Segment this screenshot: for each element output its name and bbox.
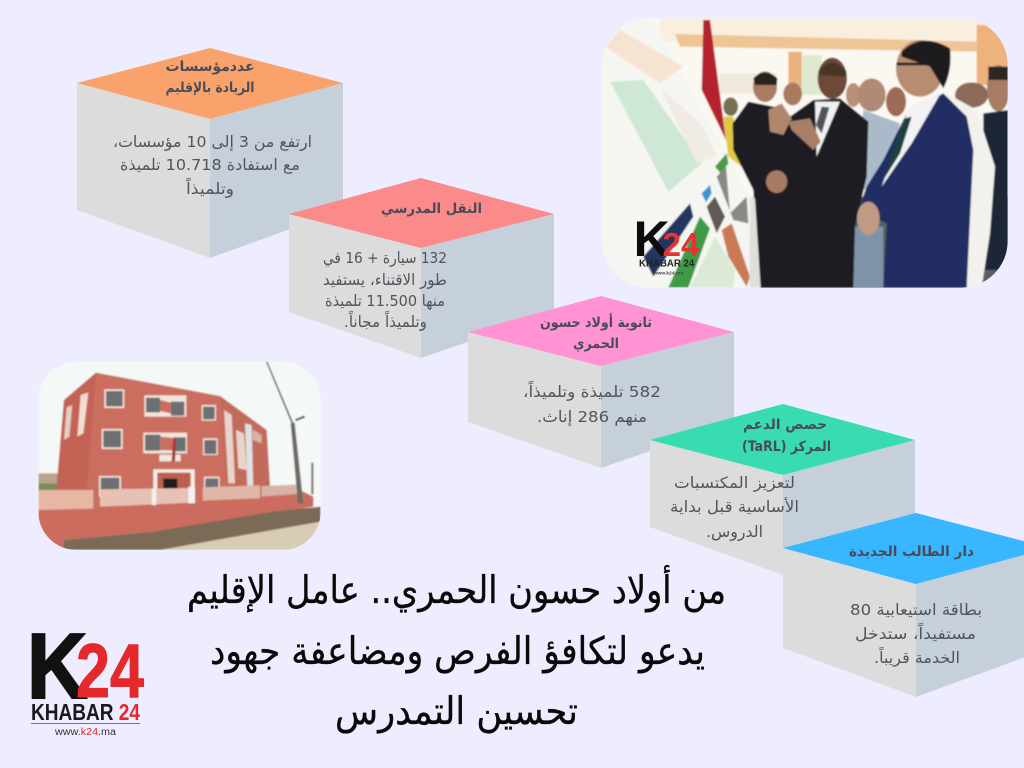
cube 4 body: الدروس. — [706, 523, 763, 542]
cube 5: new student house — [783, 513, 1024, 697]
cube 4 body — [670, 474, 799, 542]
cube 1 body: مع استفادة 10.718 تلميذة — [120, 156, 300, 175]
cube 4 heading: المركز (TaRL) — [742, 439, 831, 455]
cube 5 heading: دار الطالب الجديدة — [849, 544, 974, 560]
cube 3 body — [523, 381, 661, 427]
windows — [104, 389, 124, 408]
pole — [291, 423, 303, 503]
logo: Khabar24: KHABAR 24 — [31, 699, 140, 725]
man in dark suit, left — [733, 102, 797, 288]
wall and fence — [37, 492, 313, 552]
cube 2 body: منها 11.500 تلميذة — [325, 292, 445, 311]
cube 1 heading: الريادة بالإقليم — [166, 80, 254, 96]
central man — [784, 97, 870, 288]
photo watermark: 24 — [662, 227, 700, 264]
title: يدعو لتكافؤ الفرص ومضاعفة جهود — [210, 629, 705, 674]
cube 3 body: 582 تلميذة وتلميذاً، — [523, 381, 661, 402]
cube 5 body: بطاقة استيعابية 80 — [850, 601, 982, 619]
photo watermark: KHABAR 24 — [639, 259, 695, 270]
cube 2 body: طور الاقتناء، يستفيد — [323, 271, 447, 289]
photo watermark: K — [634, 211, 670, 267]
cube 2 body: 132 سيارة + 16 في — [323, 249, 447, 268]
photo watermark — [634, 211, 700, 276]
cube 2 body — [323, 249, 447, 332]
cube 4 body: الأساسية قبل بداية — [670, 497, 799, 516]
cube 4: TaRL support sessions — [650, 404, 915, 575]
man in navy suit — [858, 93, 973, 288]
cube 5 body: مستفيداً، ستدخل — [855, 623, 976, 643]
title: تحسين التمدرس — [335, 689, 578, 734]
cube 5 body — [850, 601, 982, 667]
cube 1 body: وتلميذاً — [185, 178, 234, 199]
ground — [63, 507, 321, 550]
display board — [660, 34, 762, 288]
cube 1 heading — [166, 59, 254, 96]
cube 4 body: لتعزيز المكتسبات — [674, 474, 795, 492]
man in light blue shirt — [858, 78, 886, 112]
photo: officials in front of a display board — [600, 17, 1013, 290]
title: من أولاد حسون الحمري.. عامل الإقليم — [187, 565, 726, 613]
cube 2 body: وتلميذاً مجاناً. — [344, 311, 427, 332]
logo: Khabar24 — [27, 614, 144, 738]
logo: Khabar24: K — [27, 614, 87, 718]
logo: Khabar24: 24 — [76, 629, 144, 714]
cube 2: school transport — [289, 178, 554, 358]
cube 3 heading — [540, 313, 652, 353]
cube 1 body: ارتفع من 3 إلى 10 مؤسسات، — [113, 133, 312, 152]
photo watermark: www.k24.ma — [652, 270, 683, 276]
cube 3: Ouled Hassoun Al Hamri high school — [468, 296, 734, 468]
cube 3 body: منهم 286 إناث. — [537, 408, 647, 427]
cube 1: pioneer schools — [77, 48, 343, 258]
cube 5 body: الخدمة قريباً. — [874, 647, 960, 667]
cube 1 body — [113, 133, 312, 199]
cube 2 heading: النقل المدرسي — [381, 201, 482, 217]
title — [187, 565, 726, 734]
crowd in background — [783, 83, 802, 105]
cube 4 heading: حصص الدعم — [743, 417, 827, 433]
entrance — [152, 468, 196, 490]
man in white — [954, 98, 996, 288]
cube 4 heading — [742, 417, 831, 455]
cube 1 heading: عددمؤسسات — [166, 59, 254, 75]
logo: Khabar24: www.k24.ma — [54, 727, 116, 738]
cube 3 heading: الحمري — [573, 336, 619, 353]
photo: red school building — [37, 360, 323, 552]
cube 3 heading: ثانوية أولاد حسون — [540, 313, 652, 331]
